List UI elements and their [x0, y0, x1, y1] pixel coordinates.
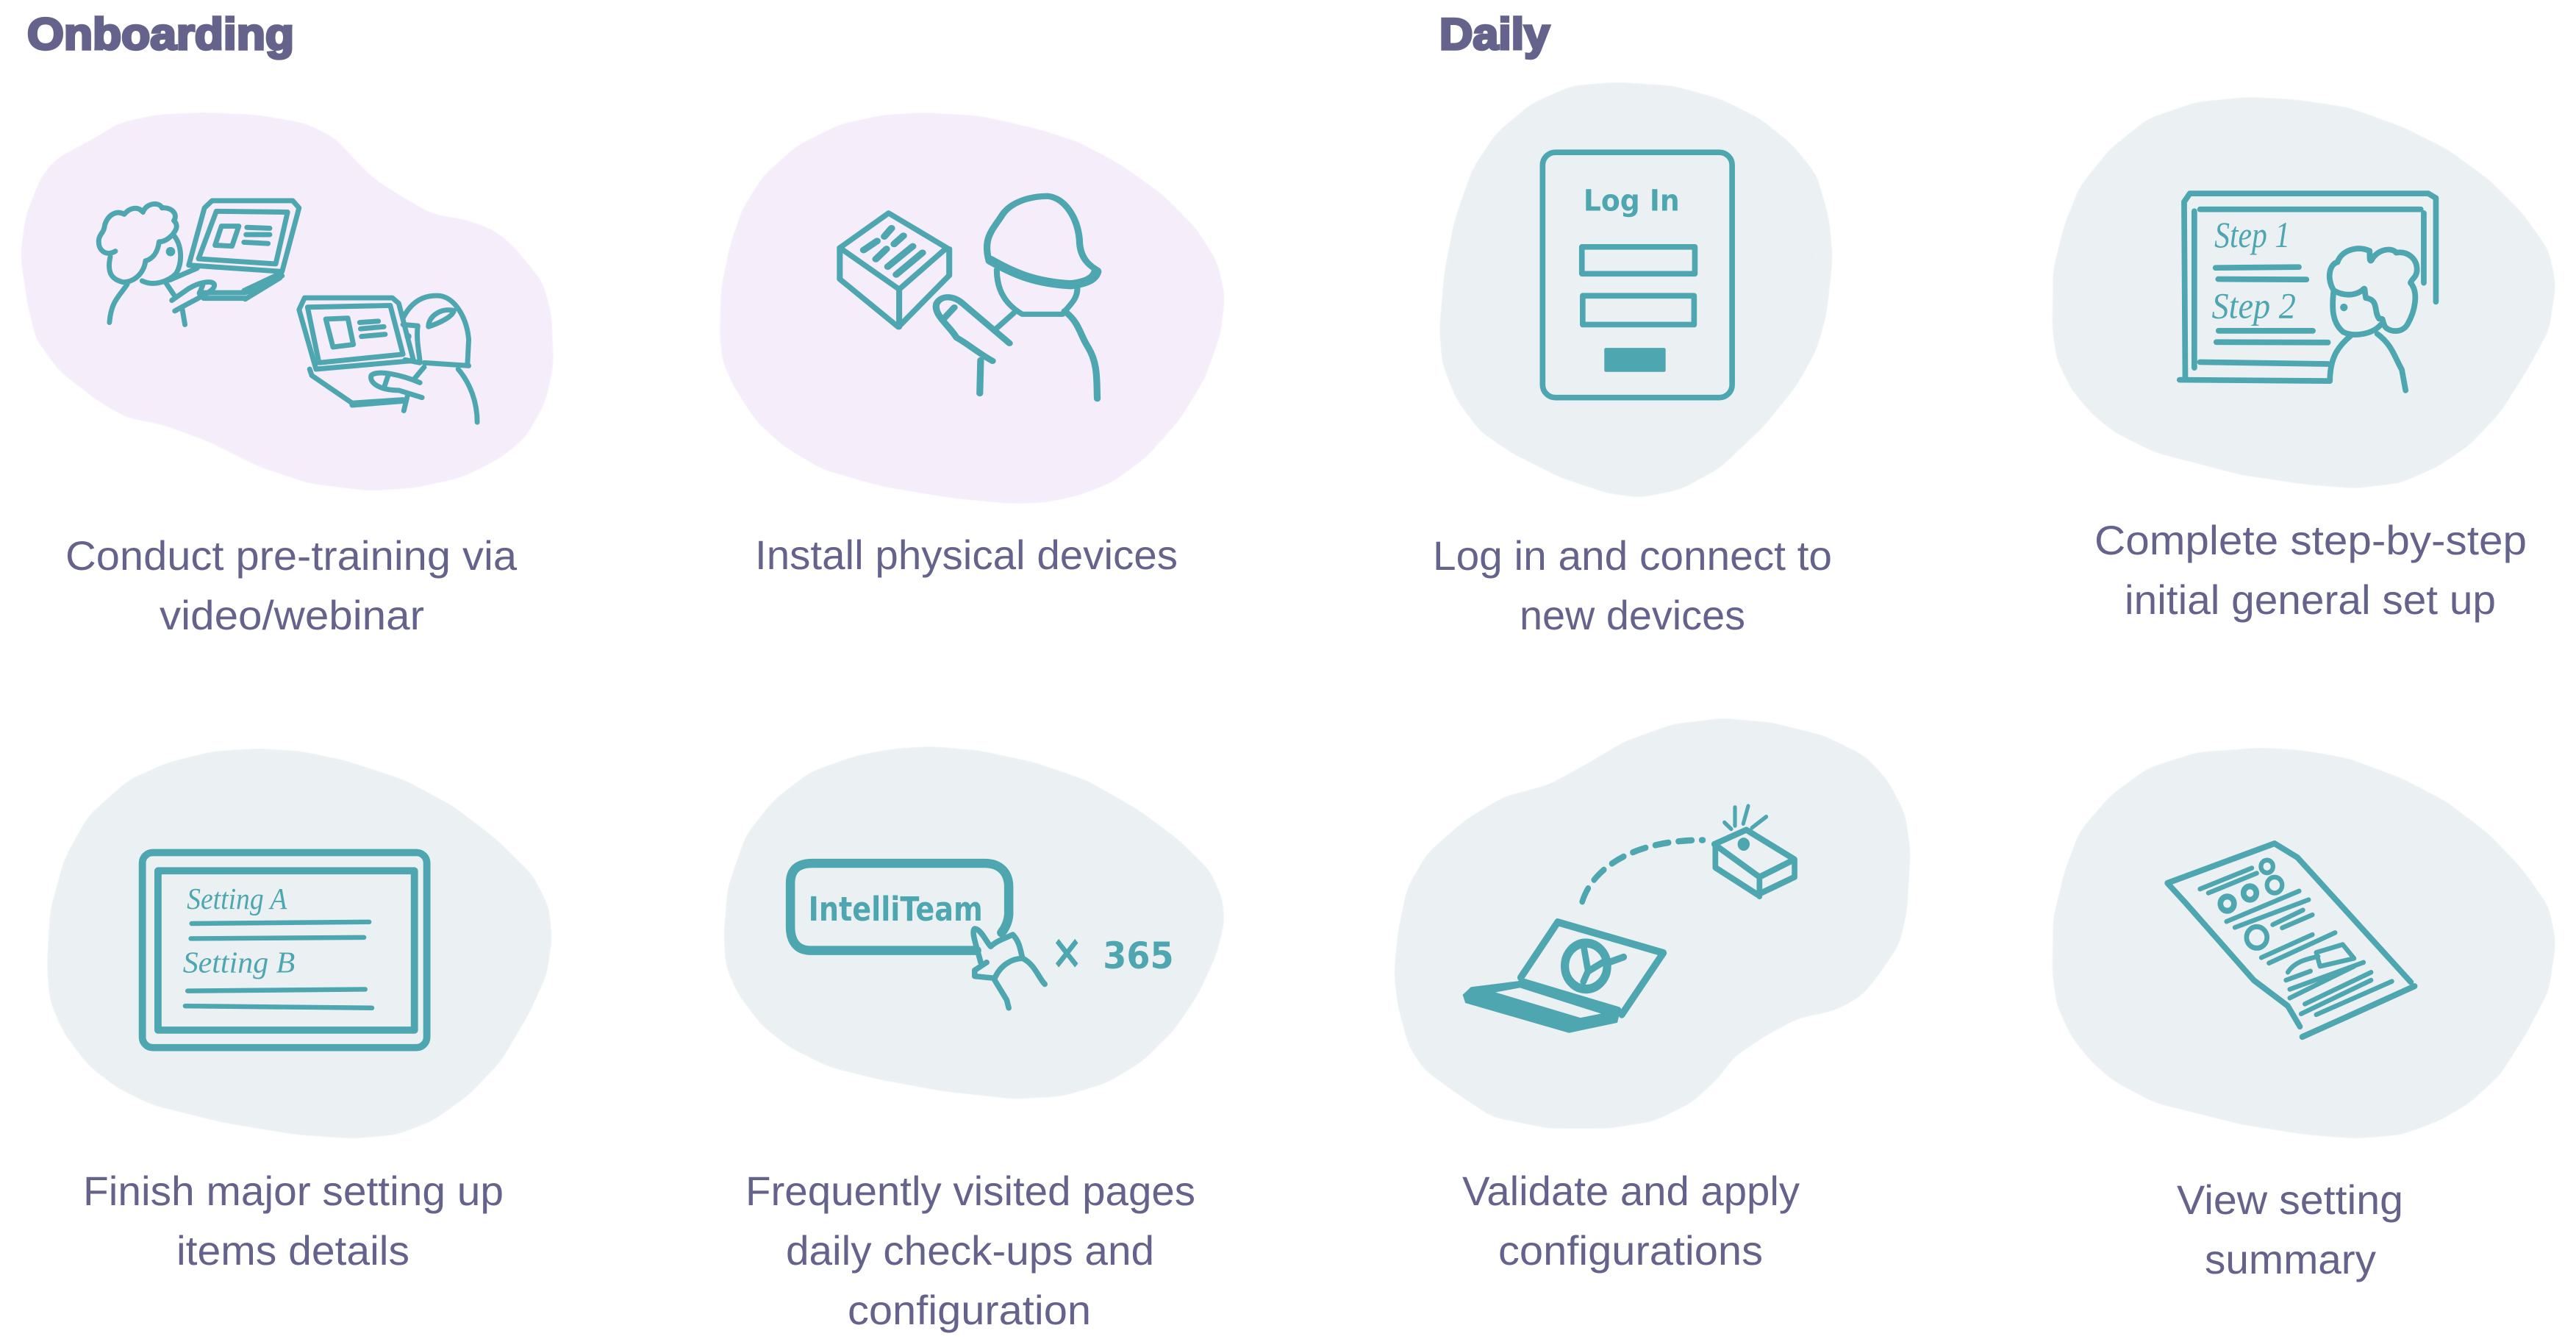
heading: Daily: Daily: [1439, 10, 1550, 59]
icon: log in form: Log In: [1584, 184, 1680, 218]
panel: view setting summary: [2053, 748, 2556, 1282]
caption: frequently visited pages: daily check-ups and: [786, 1227, 1154, 1274]
icon: technician installing device: [840, 196, 1098, 399]
blob: install background: [720, 113, 1225, 504]
caption: major settings: [83, 1168, 504, 1274]
icon: presenter at step board: [2180, 193, 2436, 390]
caption: install physical devices: Install physical devices: [755, 532, 1178, 578]
blob: validate background: [1394, 718, 1911, 1129]
blob: pre-training background: [21, 113, 554, 491]
icon: two people at laptops: [99, 201, 477, 422]
caption: validate and apply: [1462, 1168, 1800, 1274]
caption: log in: new devices: [1520, 592, 1745, 638]
icon: summary document: [2167, 843, 2415, 1037]
panel: major settings: [47, 749, 552, 1274]
icon: laptop sending configuration to device: [1463, 806, 1795, 1033]
caption: conduct pre-training: Conduct pre-training via: [65, 532, 518, 579]
caption: log in: Log in and connect to: [1433, 532, 1832, 579]
caption: step-by-step set up: Complete step-by-step: [2094, 517, 2527, 563]
heading: Onboarding: Onboarding: [27, 10, 294, 59]
blob: settings background: [47, 749, 552, 1139]
icon: log in form: [1542, 152, 1732, 398]
caption: view setting summary: summary: [2205, 1236, 2376, 1282]
icon: IntelliTeam button clicked 365 times: ×: [1051, 924, 1083, 980]
icon: settings window: Setting B: [183, 945, 295, 979]
icon: settings window: Setting A: [187, 882, 287, 915]
caption: frequently visited pages: [745, 1168, 1195, 1333]
panel: conduct pre-training: [21, 113, 554, 638]
caption: step-by-step set up: [2094, 517, 2527, 623]
caption: log in: [1433, 532, 1832, 638]
caption: view setting summary: View setting: [2177, 1176, 2403, 1223]
panel: frequently visited pages: [723, 746, 1225, 1333]
panel: step-by-step set up: [2053, 97, 2556, 623]
caption: major settings: items details: [176, 1227, 409, 1274]
caption: frequently visited pages: Frequently visited pages: [745, 1168, 1195, 1214]
panel: validate and apply: [1394, 718, 1911, 1274]
caption: view setting summary: [2177, 1176, 2403, 1282]
icon: presenter at step board: Step 1: [2214, 215, 2290, 255]
blob: step-by-step background: [2053, 97, 2556, 488]
caption: frequently visited pages: configuration: [848, 1287, 1091, 1333]
icon: IntelliTeam button clicked 365 times: 365: [1103, 935, 1174, 977]
icon: settings window: [143, 852, 427, 1048]
panel: install physical devices: [720, 113, 1225, 578]
blob: frequently visited background: [723, 746, 1225, 1099]
caption: validate and apply: configurations: [1498, 1227, 1763, 1274]
caption: step-by-step set up: initial general set up: [2125, 576, 2496, 623]
icon: IntelliTeam button clicked 365 times: IntelliTeam: [809, 890, 983, 929]
caption: conduct pre-training: video/webinar: [160, 592, 424, 638]
caption: major settings: Finish major setting up: [83, 1168, 504, 1214]
icon: presenter at step board: Step 2: [2212, 286, 2296, 326]
caption: validate and apply: Validate and apply: [1462, 1168, 1800, 1214]
blob: summary background: [2053, 748, 2556, 1139]
caption: conduct pre-training: [65, 532, 518, 638]
icon: IntelliTeam button clicked 365 times: [790, 863, 1174, 1008]
panel: log in: [1433, 82, 1833, 638]
blob: log in background: [1439, 82, 1833, 498]
